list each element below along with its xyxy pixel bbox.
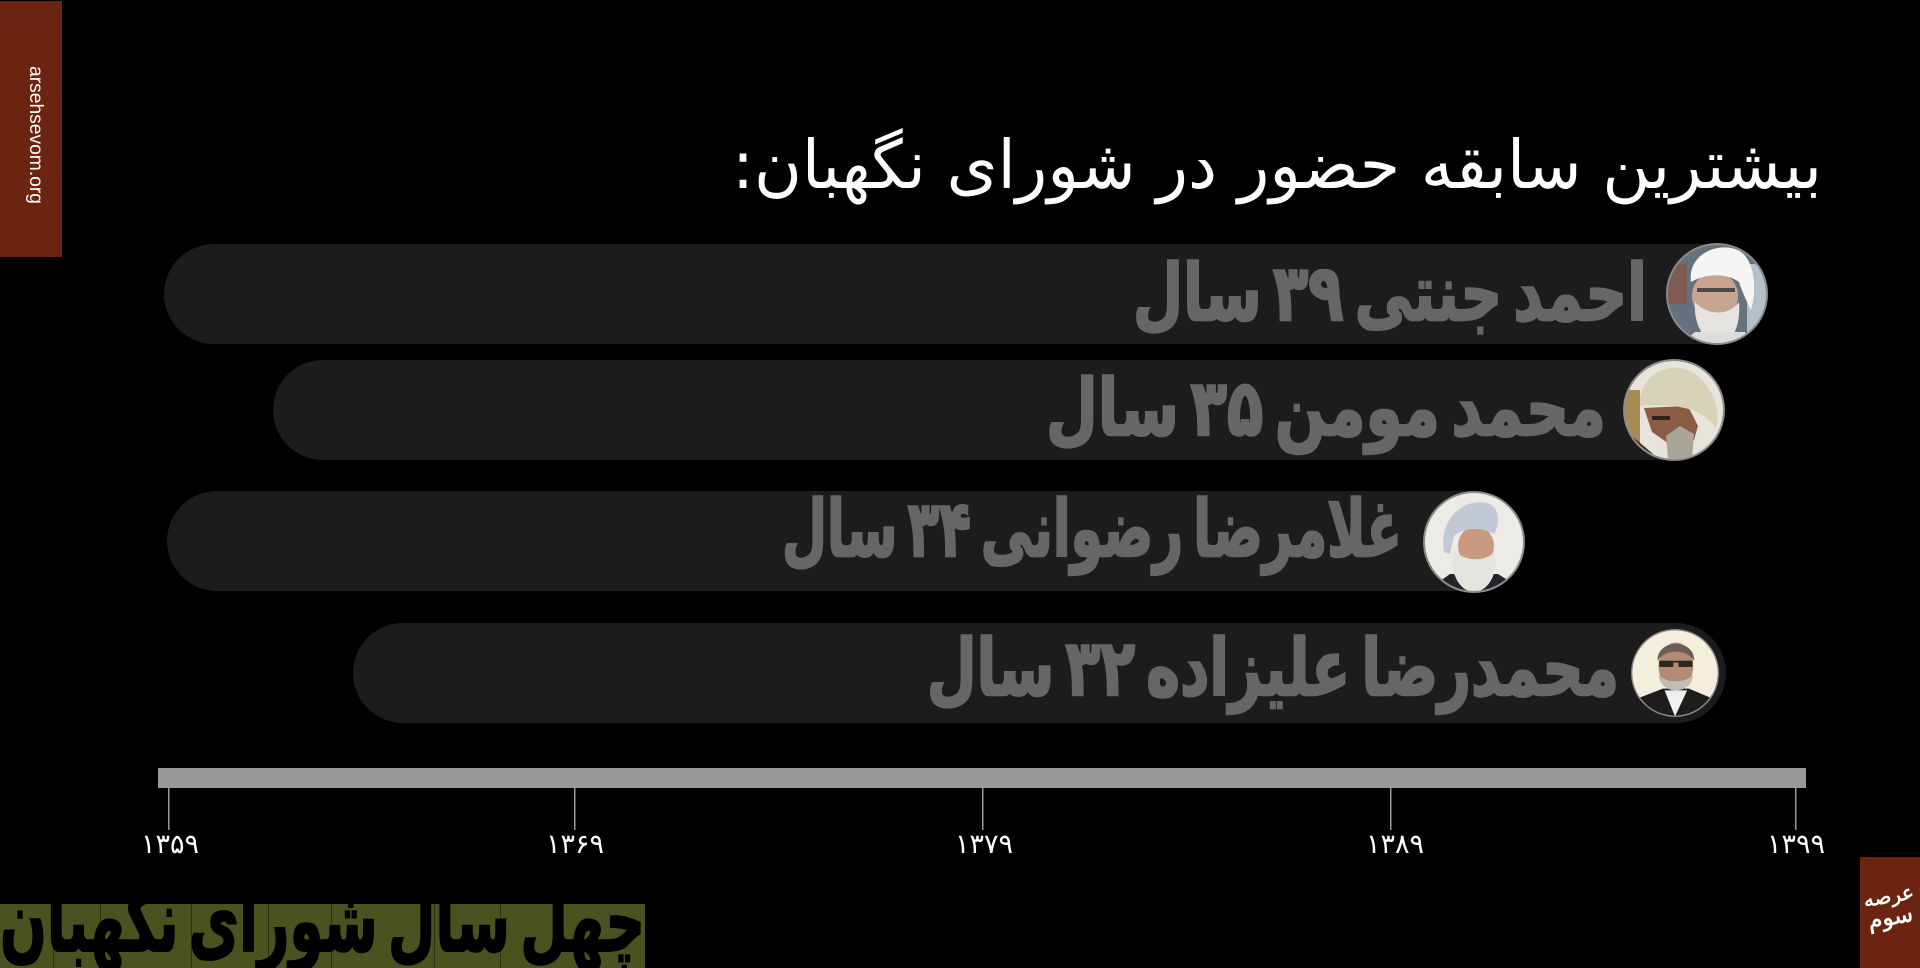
bar: 39 years — [164, 244, 1717, 344]
name label: محمد مومن ۳۵ سال — [1046, 364, 1606, 454]
tick and label: 1359: ۱۳۵۹ — [141, 829, 199, 860]
tick and label: 1379 — [955, 788, 1013, 860]
side tab: website: arsehsevom.org — [25, 66, 46, 204]
row: Ahmad Jannati, 39 years — [164, 243, 1768, 345]
title: بیشترین سابقه حضور در شورای نگهبان: — [732, 126, 1822, 205]
name label: غلامرضا رضوانی ۳۴ سال — [782, 485, 1402, 575]
logo wordmark: عرصه — [1861, 880, 1916, 912]
tick and label: 1369 — [546, 788, 604, 860]
logo tab — [1860, 857, 1920, 968]
tick and label: 1389 — [1366, 788, 1424, 860]
tick and label: 1379: ۱۳۷۹ — [955, 829, 1013, 860]
portrait: Momen — [1623, 359, 1725, 461]
row: Gholamreza Rezvani, 34 years — [167, 485, 1525, 593]
logo wordmark — [1861, 880, 1920, 935]
tick and label: 1389: ۱۳۸۹ — [1366, 829, 1424, 860]
name label: محمدرضا علیزاده ۳۲ سال — [927, 624, 1619, 714]
portrait: Alizadeh — [1631, 629, 1719, 717]
axis bar — [158, 768, 1806, 788]
timeline axis — [141, 768, 1825, 860]
tick and label: 1399: ۱۳۹۹ — [1767, 829, 1825, 860]
bar: 35 years — [273, 360, 1674, 460]
row: Mohammad Momen, 35 years — [273, 359, 1725, 461]
bar: 32 years — [353, 623, 1726, 723]
portrait: Jannati — [1666, 243, 1768, 345]
row: Mohammadreza Alizadeh, 32 years — [353, 623, 1726, 723]
bar: 34 years — [167, 491, 1474, 591]
footer banner — [0, 904, 645, 968]
tick and label: 1399 — [1767, 788, 1825, 860]
portrait: Rezvani — [1423, 491, 1525, 593]
tick and label: 1369: ۱۳۶۹ — [546, 829, 604, 860]
side tab: website — [0, 1, 62, 257]
name label: احمد جنتی ۳۹ سال — [1133, 249, 1647, 339]
logo wordmark: سوم — [1866, 901, 1915, 935]
tick and label: 1359 — [141, 788, 199, 860]
